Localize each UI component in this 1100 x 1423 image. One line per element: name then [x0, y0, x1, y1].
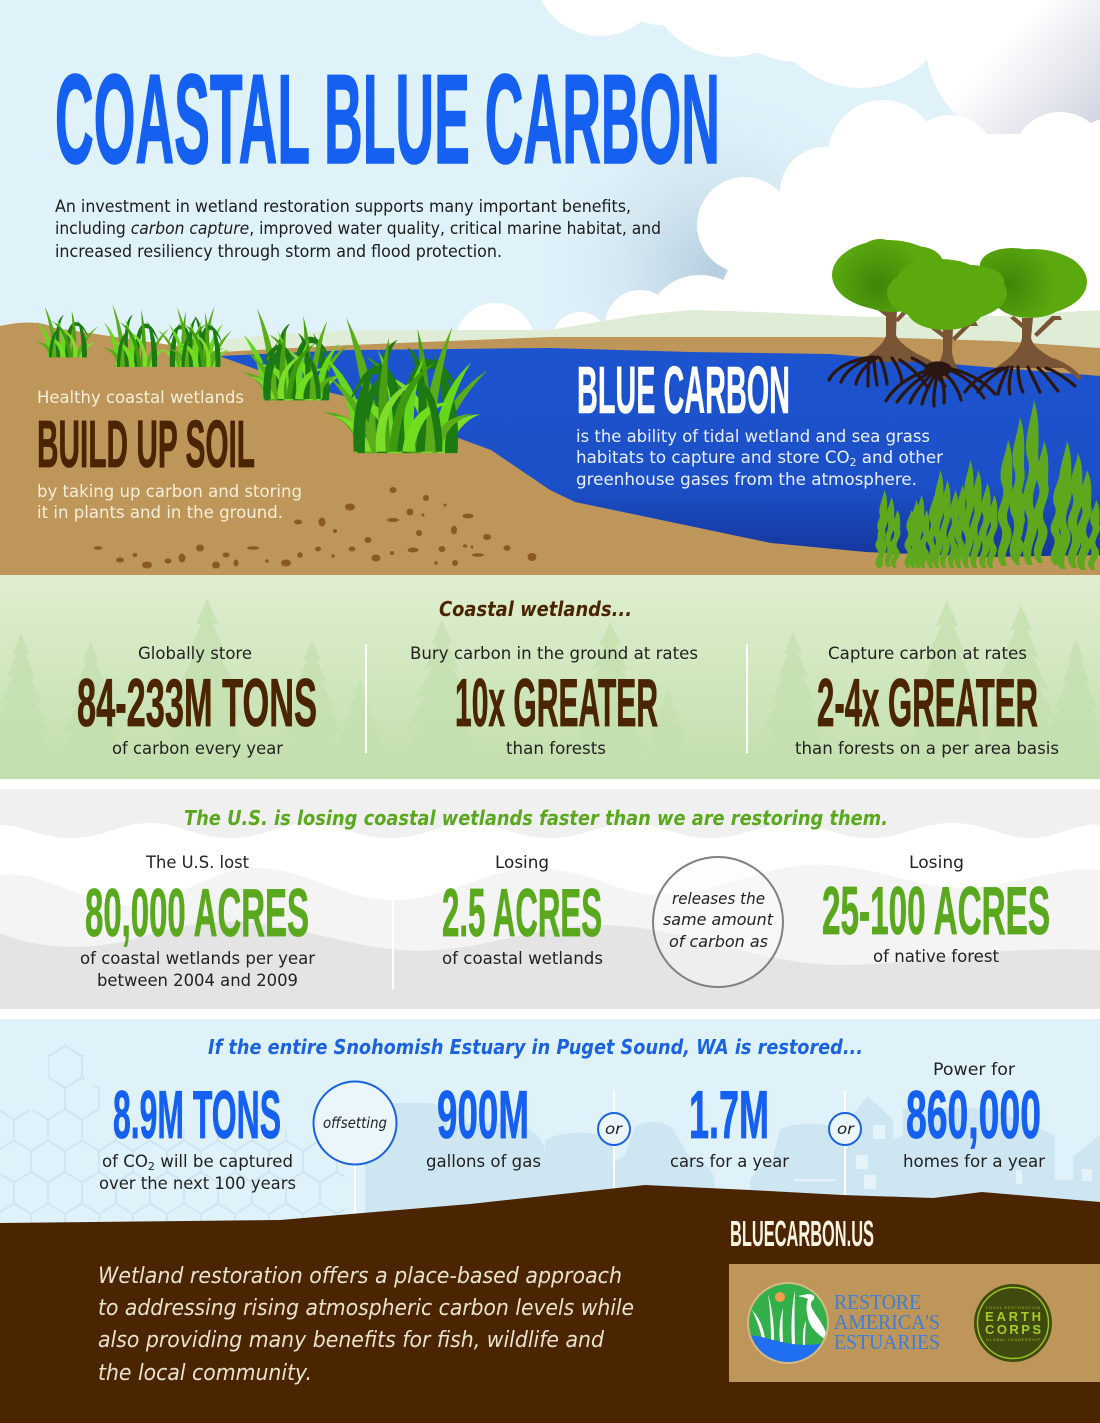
stat: 8.9M tons: will be captured: [155, 1152, 293, 1171]
stat: 2.5 acres: of coastal wetlands: [442, 949, 603, 968]
intro text: [55, 197, 661, 261]
callout: or: or: [837, 1120, 855, 1138]
stat: globally store: Globally store: [138, 644, 252, 663]
callout: releases the same amount: of carbon as: [669, 932, 768, 951]
stat: 900M gallons: gallons of gas: [426, 1152, 541, 1171]
stat: 2.5 acres: [442, 853, 603, 968]
landscape: hills, soil and water: [0, 310, 1100, 575]
stat: 900M gallons: [426, 1077, 541, 1171]
stat: 1.7M cars: cars for a year: [670, 1152, 789, 1171]
stat: bury carbon: [410, 644, 698, 758]
soil particles: [94, 487, 536, 568]
panel: blue carbon definition: greenhouse gases from the atmosphere.: [576, 470, 917, 490]
gas can silhouette: [545, 1132, 615, 1200]
panel: U.S. wetland loss: 80,000 ACRES: [85, 875, 309, 951]
stat: capture carbon: Capture carbon at rates: [828, 644, 1027, 663]
stat: 860,000 homes: homes for a year: [903, 1152, 1045, 1171]
closing statement: [98, 1264, 634, 1386]
intro text: increased resiliency through storm and flood protection.: [55, 242, 502, 261]
logo: Restore America's Estuaries: ESTUARIES: [834, 1330, 940, 1354]
intro text: An investment in wetland restoration supports many important benefits,: [55, 197, 631, 216]
mangrove trees: [829, 239, 1087, 406]
closing statement: to addressing rising atmospheric carbon levels while: [98, 1296, 634, 1321]
stat: globally store: 84-233M TONS: [77, 665, 317, 741]
callout: or: [829, 1113, 861, 1145]
closing statement: Wetland restoration offers a place-based approach: [98, 1264, 622, 1289]
stat: globally store: [77, 644, 317, 758]
stat: capture carbon: than forests on a per area basis: [795, 739, 1059, 758]
car silhouette: [750, 1124, 848, 1205]
hexagon carbon pattern: [0, 1044, 345, 1225]
logo: EarthCorps: GLOBAL LEADERSHIP: [986, 1337, 1040, 1342]
closing statement: the local community.: [98, 1361, 312, 1386]
heading: The U.S. is losing coastal wetlands faster than we are restoring them.: [184, 806, 888, 830]
callout: releases the same amount: [653, 857, 783, 987]
car silhouette: [610, 1122, 715, 1205]
panel: build up soil: [37, 388, 302, 523]
panel: blue carbon definition: habitats to capture and store CO: [576, 448, 855, 468]
callout: releases the same amount: same amount: [663, 910, 774, 929]
canopies: [832, 239, 944, 312]
callout: or: [598, 1113, 630, 1145]
stat: 860,000 homes: Power for: [933, 1060, 1015, 1079]
stat: bury carbon: 10x GREATER: [455, 665, 658, 741]
callout: offsetting: [314, 1082, 396, 1164]
panel: coastal wetlands stats: [0, 575, 1100, 779]
stat: bury carbon: than forests: [506, 739, 606, 758]
panel: build up soil: by taking up carbon and storing: [37, 482, 302, 502]
panel: Snohomish Estuary restoration: [0, 1019, 1100, 1229]
panel: blue carbon definition: 2: [850, 456, 857, 469]
forest silhouette: [0, 598, 1100, 779]
intro text: including carbon capture, improved water quality, critical marine habitat, and: [55, 219, 661, 238]
stat: 860,000 homes: [903, 1060, 1045, 1171]
stat: 25-100 acres: [822, 853, 1050, 966]
logo panel: [729, 1264, 1100, 1382]
panel: footer: BLUECARBON.US: [730, 1213, 874, 1254]
gas pump silhouette: [365, 1103, 545, 1225]
stat: 25-100 acres: of native forest: [873, 947, 1000, 966]
stat: 1.7M cars: [670, 1077, 789, 1171]
logo: EarthCorps: LOCAL RESTORATION: [986, 1305, 1040, 1310]
stat: capture carbon: [795, 644, 1059, 758]
panel: blue carbon definition: BLUE CARBON: [577, 353, 790, 428]
tree roots: [829, 357, 1075, 406]
wetland grass clumps: [36, 304, 487, 453]
callout: offsetting: offsetting: [323, 1114, 387, 1132]
panel: U.S. wetland loss: 2.5 ACRES: [442, 875, 602, 951]
stat: 1.7M cars: 1.7M: [689, 1077, 769, 1153]
panel: footer: [0, 1185, 1100, 1423]
stat: 8.9M tons: of CO: [102, 1152, 148, 1171]
heading: If the entire Snohomish Estuary in Puget Sound, WA is restored...: [208, 1035, 863, 1059]
stat: bury carbon: Bury carbon in the ground at rates: [410, 644, 698, 663]
stat: 80,000 acres: The U.S. lost: [145, 853, 250, 872]
sky background: [0, 0, 1100, 340]
stat: 8.9M tons: 2: [148, 1160, 155, 1173]
panel: blue carbon definition: [576, 353, 943, 490]
stat: 80,000 acres: between 2004 and 2009: [97, 971, 298, 990]
logo: EarthCorps: EARTH: [985, 1309, 1041, 1324]
heading: Coastal wetlands...: [439, 597, 632, 621]
stat: globally store: of carbon every year: [112, 739, 283, 758]
logo: Restore America's Estuaries: AMERICA'S: [834, 1310, 940, 1334]
callout: or: or: [605, 1120, 623, 1138]
stat: 25-100 acres: Losing: [909, 853, 964, 872]
callout: releases the same amount: releases the: [672, 889, 765, 908]
logo: Restore America's Estuaries: [745, 1282, 940, 1365]
stat: 2.5 acres: Losing: [495, 853, 549, 872]
tree trunks: [860, 306, 1082, 380]
stat: 8.9M tons: over the next 100 years: [99, 1174, 296, 1193]
stat: 900M gallons: 900M: [437, 1077, 529, 1153]
panel: build up soil: Healthy coastal wetlands: [37, 388, 244, 408]
panel: build up soil: it in plants and in the ground.: [37, 503, 283, 523]
closing statement: also providing many benefits for fish, wildlife and: [98, 1328, 605, 1353]
panel: U.S. wetland loss: [0, 789, 1100, 1009]
clouds: [455, 0, 1100, 385]
stat: 8.9M tons: 8.9M TONS: [113, 1077, 281, 1153]
panel: build up soil: BUILD UP SOIL: [37, 407, 255, 482]
stat: 80,000 acres: of coastal wetlands per year: [80, 949, 315, 968]
panel: blue carbon definition: is the ability of tidal wetland and sea grass: [576, 427, 930, 447]
stat: 8.9M tons: [99, 1077, 296, 1193]
logo: Restore America's Estuaries: RESTORE: [834, 1290, 921, 1314]
house silhouettes: [848, 1096, 1100, 1205]
sea grass: [875, 400, 1100, 570]
panel: blue carbon definition: and other: [857, 448, 943, 468]
logo: EarthCorps: [974, 1284, 1052, 1362]
logo: EarthCorps: CORPS: [985, 1322, 1041, 1337]
stat: 80,000 acres: [80, 853, 315, 990]
